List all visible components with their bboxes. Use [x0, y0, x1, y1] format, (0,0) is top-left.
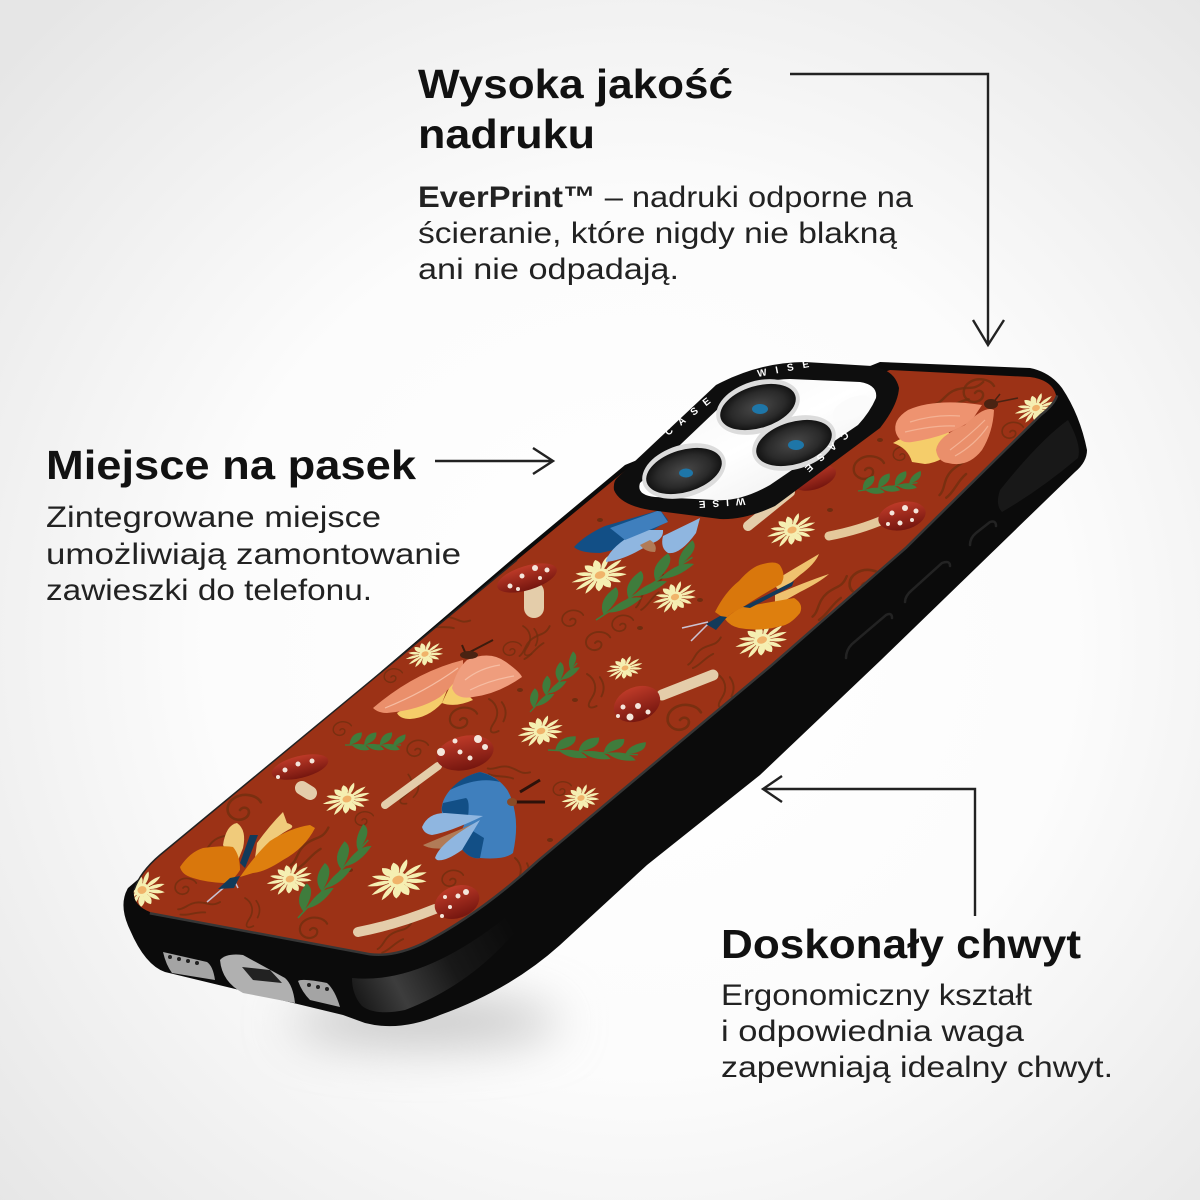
- camera island: [614, 357, 899, 519]
- body line one: EverPrint™ – nadruki odporne na: [418, 181, 913, 214]
- blue moth lower: [422, 772, 545, 860]
- right speaker: [298, 980, 340, 1007]
- heading: Miejsce na pasek: [46, 442, 416, 488]
- phone shadow: [290, 998, 560, 1046]
- lens left: [635, 434, 733, 508]
- body line two: umożliwiają zamontowanie: [46, 538, 461, 571]
- screen outline shadow: [134, 560, 517, 890]
- camera island: WISE: [756, 357, 819, 380]
- ring lettering: CASE: [663, 390, 720, 438]
- heading: Wysoka jakość: [418, 61, 733, 107]
- lens top: [709, 370, 807, 444]
- peach moth top right: [893, 394, 1018, 464]
- phone case: [123, 362, 1087, 1026]
- side panel: [998, 420, 1079, 512]
- camera glass: [639, 379, 876, 500]
- arrow: to strap mount: [435, 448, 553, 474]
- case body: [123, 362, 1087, 1026]
- brown swirls: [175, 379, 1023, 954]
- body line one: Ergonomiczny kształt: [721, 979, 1033, 1012]
- green sprigs: [286, 469, 923, 923]
- blue moth upper: [574, 510, 700, 562]
- daisies: [114, 389, 1060, 913]
- camera island: WISE: [691, 495, 746, 510]
- callout: print quality: [418, 61, 913, 286]
- rim highlight: [150, 395, 1056, 954]
- peach moth middle: [373, 640, 522, 719]
- printed red pattern: [134, 370, 1056, 954]
- callout: strap mount: [46, 442, 461, 607]
- body line one: Zintegrowane miejsce: [46, 501, 381, 534]
- arrow: to grip: [763, 776, 975, 916]
- charging port: [220, 955, 295, 1003]
- corner reflection: [352, 918, 515, 1012]
- heading: Doskonały chwyt: [721, 921, 1081, 967]
- orange moth upper: [682, 554, 829, 641]
- side buttons: [846, 522, 996, 658]
- flash: [829, 390, 875, 426]
- body line three: zapewniają idealny chwyt.: [721, 1051, 1113, 1084]
- mushrooms: [269, 460, 928, 932]
- camera island: CASE: [796, 429, 850, 480]
- body line two: ścieranie, które nigdy nie blakną: [418, 217, 897, 250]
- lens right: [745, 406, 843, 480]
- body line three: ani nie odpadają.: [418, 253, 679, 286]
- heading second line: nadruku: [418, 111, 595, 157]
- red print base: [134, 370, 1056, 954]
- camera ring: [614, 362, 899, 519]
- arrow: to print: [790, 74, 1004, 345]
- orange moth lower: [180, 812, 315, 902]
- body line two: i odpowiednia waga: [721, 1015, 1024, 1048]
- callout: grip: [721, 921, 1113, 1084]
- body line three: zawieszki do telefonu.: [46, 574, 372, 607]
- left speaker: [163, 952, 215, 980]
